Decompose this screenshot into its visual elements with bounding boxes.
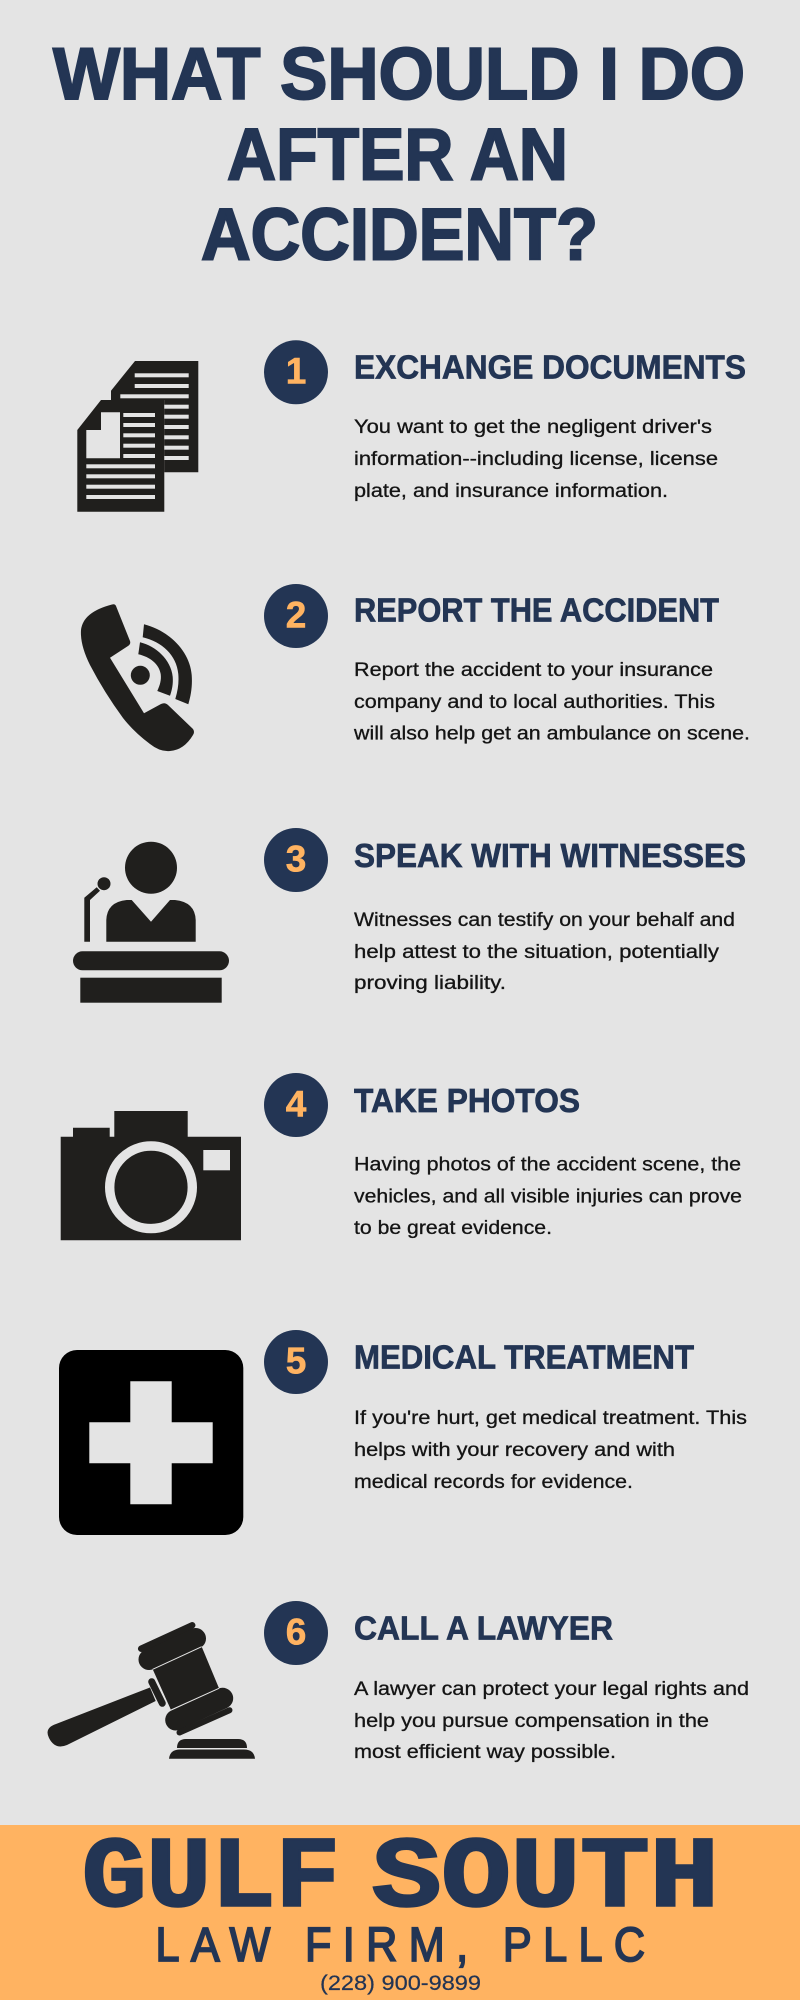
step 5 [264, 1330, 747, 1493]
icon: medical cross [59, 1350, 243, 1535]
firm subtitle: LAW FIRM, PLLC [156, 1918, 645, 1972]
icon: witness at podium [73, 842, 229, 1003]
heading 6: CALL A LAWYER [354, 1610, 613, 1647]
body text 5: If you're hurt, get medical treatment. This [354, 1408, 747, 1429]
number badge 2: 2 [286, 594, 306, 636]
title [53, 34, 745, 276]
number badge 4 [264, 1073, 328, 1137]
number badge 1: 1 [286, 350, 306, 392]
step 2 [264, 584, 750, 744]
body text 2: will also help get an ambulance on scene. [353, 724, 750, 744]
body text 4: Having photos of the accident scene, the [354, 1155, 741, 1176]
heading 4: TAKE PHOTOS [354, 1083, 580, 1120]
body text 2 [353, 660, 750, 744]
body text 5: helps with your recovery and with [354, 1440, 675, 1461]
body text 1 [354, 417, 718, 502]
body text 4: to be great evidence. [354, 1218, 552, 1239]
body text 1: plate, and insurance information. [354, 481, 668, 502]
number badge 3 [264, 828, 328, 892]
firm name: SOUTH [372, 1824, 719, 1936]
body text 3: help attest to the situation, potentially [354, 942, 720, 963]
firm name: GULF [82, 1824, 340, 1936]
body text 5 [354, 1408, 747, 1493]
body text 6: A lawyer can protect your legal rights and [354, 1679, 749, 1700]
icon: documents [77, 361, 198, 512]
title: ACCIDENT? [201, 194, 598, 276]
body text 2: Report the accident to your insurance [354, 660, 713, 681]
number badge 2 [264, 584, 328, 648]
step 4 [264, 1073, 742, 1239]
title: WHAT SHOULD I DO [53, 34, 745, 115]
body text 1: You want to get the negligent driver's [354, 417, 712, 438]
heading 1: EXCHANGE DOCUMENTS [354, 349, 746, 386]
body text 5: medical records for evidence. [354, 1472, 633, 1493]
icon: gavel [48, 1625, 255, 1759]
step 6 [264, 1601, 749, 1763]
step 3 [264, 828, 746, 994]
body text 3 [354, 910, 735, 994]
step 1 [264, 340, 746, 502]
body text 4 [354, 1155, 742, 1239]
heading 2: REPORT THE ACCIDENT [354, 592, 719, 629]
body text 6: help you pursue compensation in the [354, 1711, 709, 1732]
heading 5: MEDICAL TREATMENT [354, 1339, 694, 1376]
number badge 5 [264, 1330, 328, 1394]
icon: camera [61, 1111, 241, 1240]
body text 2: company and to local authorities. This [354, 692, 715, 713]
body text 3: proving liability. [354, 973, 506, 994]
body text 3: Witnesses can testify on your behalf and [354, 910, 735, 931]
number badge 4: 4 [286, 1084, 307, 1124]
footer banner [0, 1824, 800, 2000]
firm name [82, 1824, 719, 1936]
heading 3: SPEAK WITH WITNESSES [354, 838, 746, 875]
body text 6: most efficient way possible. [354, 1742, 616, 1763]
phone number: (228) 900-9899 [320, 1972, 481, 1995]
number badge 6 [264, 1601, 328, 1665]
number badge 6: 6 [286, 1612, 306, 1652]
number badge 5: 5 [286, 1340, 306, 1382]
number badge 1 [264, 340, 328, 404]
body text 1: information--including license, license [354, 449, 718, 470]
body text 4: vehicles, and all visible injuries can prove [354, 1187, 742, 1208]
body text 6 [354, 1679, 749, 1763]
number badge 3: 3 [286, 838, 306, 880]
icon: telephone [81, 604, 194, 751]
title: AFTER AN [227, 114, 568, 196]
